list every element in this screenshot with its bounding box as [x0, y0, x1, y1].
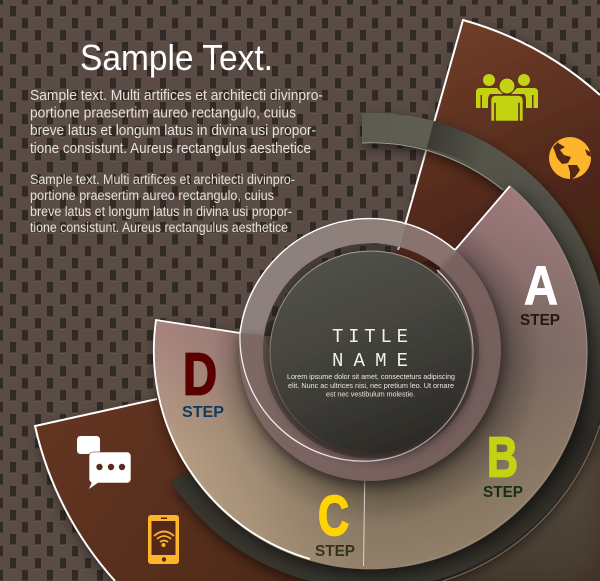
centre description: elit. Nunc ac ultrices nisi, nec pretium leo. Ut ornare [288, 381, 454, 390]
text block 2: tione consistunt. Aureus rectangulus aesthetice [30, 220, 288, 235]
step B label: B [487, 426, 518, 490]
step A label [520, 254, 560, 329]
text block 2: breve latus et longum latus in divina usi propor- [30, 204, 292, 219]
text block 1: Sample text. Multi artifices et architecti divinpro- [30, 88, 323, 104]
centre ring [239, 219, 501, 481]
centre dark disc [270, 251, 472, 453]
centre title: TITLE [332, 326, 408, 348]
dark curved band [171, 113, 600, 581]
step B label: STEP [483, 484, 523, 501]
centre title [332, 326, 408, 372]
text block 1 [30, 88, 323, 157]
centre description: est nec vestibulum molestie. [326, 390, 415, 398]
panel: step sectors A B C D [154, 186, 588, 569]
text block 2: portione praesertim aureo rectangulo, cuius [30, 188, 274, 203]
step A label: STEP [520, 312, 560, 329]
icon: chat bubbles [77, 436, 131, 489]
step D label: STEP [182, 404, 224, 421]
icon: people [476, 74, 538, 121]
icon: globe [549, 137, 591, 180]
heading: Sample Text. [80, 37, 273, 78]
text block 1: portione praesertim aureo rectangulo, cuius [30, 106, 296, 122]
step B label [483, 426, 523, 501]
step D label: D [183, 342, 217, 408]
centre title: NAME [332, 350, 408, 372]
step C label: C [318, 484, 349, 548]
centre description: Lorem ipsume dolor sit amet, consecteturs adipiscing [287, 372, 455, 381]
centre description [287, 372, 455, 398]
step A label: A [524, 254, 558, 316]
text block 2: Sample text. Multi artifices et architecti divinpro- [30, 172, 295, 187]
step C label: STEP [315, 543, 355, 560]
text block 2 [30, 172, 295, 235]
text block 1: breve latus et longum latus in divina usi propor- [30, 123, 316, 139]
text block 1: tione consistunt. Aureus rectangulus aesthetice [30, 141, 311, 157]
icon: smartphone wifi [148, 515, 179, 564]
